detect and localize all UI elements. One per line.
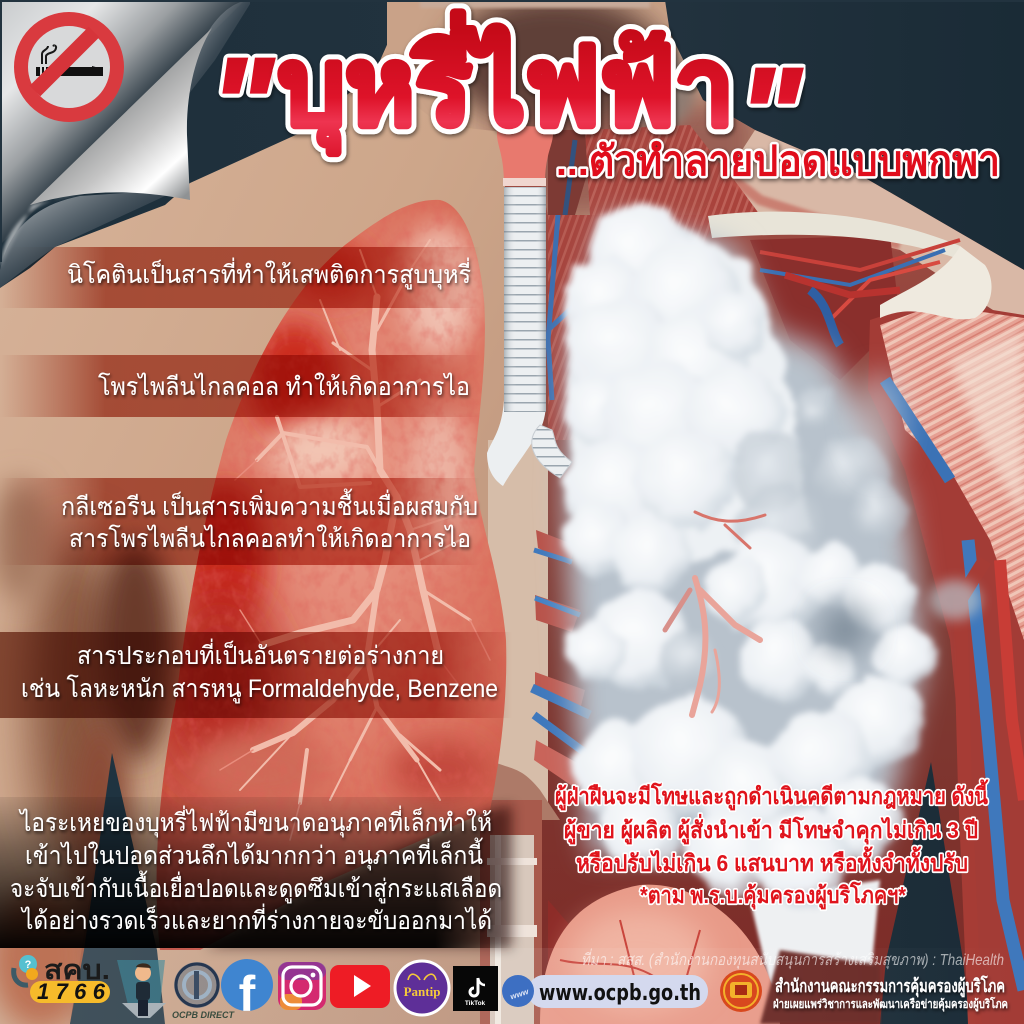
trachea windpipe xyxy=(487,95,572,486)
legal penalty notice: ผู้ขาย ผู้ผลิต ผู้สั่งนำเข้า มีโทษจำคุกไม่เกิน 3 ปี xyxy=(564,813,978,845)
text band 3 xyxy=(0,478,480,565)
shoulder blood vessels xyxy=(760,240,960,345)
logo: office seal xyxy=(720,970,762,1012)
text band 2 xyxy=(0,355,480,417)
website link pill: www.ocpb.go.th xyxy=(539,981,701,1006)
text block: nicotine: นิโคตินเป็นสารที่ทำให้เสพติดการสูบบุหรี่ xyxy=(67,257,471,290)
icon: Facebook: f xyxy=(239,966,256,1022)
subtitle: ...ตัวทำลายปอดแบบพกพา xyxy=(556,138,1000,184)
icon: TikTok xyxy=(453,966,498,1011)
page curl corner xyxy=(0,0,1024,288)
bronchial tree xyxy=(220,240,490,840)
website link pill xyxy=(502,975,708,1008)
text block: glycerin xyxy=(61,488,478,553)
arm xyxy=(868,300,1024,1024)
icon: Facebook xyxy=(221,959,273,1022)
website link pill: www xyxy=(509,987,530,1001)
neck with chin shadow xyxy=(370,0,770,220)
text band 1 xyxy=(0,247,480,308)
text block: propylene glycol: โพรไพลีนไกลคอล ทำให้เกิดอาการไอ xyxy=(98,372,470,401)
title: " xyxy=(210,31,274,178)
bottom organ xyxy=(540,885,880,1024)
icon: TikTok: TikTok xyxy=(465,1000,486,1007)
text band 5 xyxy=(0,797,512,948)
ribs xyxy=(532,530,595,790)
title: บุหรี่ไฟฟ้า xyxy=(278,11,734,155)
icon: YouTube xyxy=(330,965,390,1008)
title xyxy=(210,11,802,188)
shadow below the lung xyxy=(205,805,512,948)
logo: OCPB direct xyxy=(172,962,236,1020)
icon: Instagram xyxy=(278,962,326,1010)
logo: 1766 hotline: ? xyxy=(25,959,32,971)
left lung (healthy red lung) xyxy=(156,200,506,950)
smoke-filled right lung xyxy=(562,203,981,985)
text block: aerosol particles: เข้าไปในปอดส่วนลึกได้มากกว่า อนุภาคที่เล็กนี้ xyxy=(25,837,483,871)
logo: 1766 hotline: 1766 xyxy=(37,979,106,1004)
text block: aerosol particles: จะจับเข้ากับเนื้อเยื่อปอดและดูดซึมเข้าสู่กระแสเลือด xyxy=(10,870,502,904)
right anatomy: muscles of the neck, chest and arm xyxy=(505,100,1024,1024)
logo: 1766 hotline xyxy=(14,955,110,1004)
spine column xyxy=(480,440,560,1024)
legal penalty notice: *ตาม พ.ร.บ.คุ้มครองผู้บริโภคฯ* xyxy=(640,881,906,910)
title: " xyxy=(210,31,274,178)
title: บุหรี่ไฟฟ้า xyxy=(278,11,734,155)
text block: harmful substances: สารประกอบที่เป็นอันตรายต่อร่างกาย xyxy=(77,638,444,670)
footer strip xyxy=(0,948,1024,1024)
text block: aerosol particles: ได้อย่างรวดเร็วและยากที่ร่างกายจะขับออกมาได้ xyxy=(20,903,492,935)
torso skin with raised arm xyxy=(0,0,505,1024)
title: " xyxy=(738,41,802,188)
text band 4 xyxy=(0,632,512,718)
logo: OCPB direct: OCPB DIRECT xyxy=(172,1010,236,1020)
text block: harmful substances xyxy=(21,638,498,704)
red vessels in the smoke xyxy=(665,512,765,715)
legal penalty notice xyxy=(555,779,989,910)
logo: Pantip xyxy=(395,961,449,1015)
logo: 1766 hotline: สคบ. xyxy=(44,955,110,985)
logo: Pantip: Pantip xyxy=(404,984,440,999)
icon: mascot with hologram xyxy=(117,960,166,1018)
text block: glycerin: สารโพรไพลีนไกลคอลทำให้เกิดอาการไอ xyxy=(69,524,471,553)
collarbone and shoulder bone xyxy=(708,212,992,319)
text block: harmful substances: เช่น โลหะหนัก สารหนู Formaldehyde, Benzene xyxy=(21,674,498,704)
icon: no smoking e-cigarette sign xyxy=(21,19,117,115)
dark gap under the arm xyxy=(70,753,165,1024)
text block: aerosol particles: ไอระเหยของบุหรี่ไฟฟ้ามีขนาดอนุภาคที่เล็กทำให้ xyxy=(18,805,492,838)
title: " xyxy=(738,41,802,188)
text block: glycerin: กลีเซอรีน เป็นสารเพิ่มความชื้นเมื่อผสมกับ xyxy=(61,488,478,521)
text block: aerosol particles xyxy=(10,805,502,935)
legal penalty notice: หรือปรับไม่เกิน 6 แสนบาท หรือทั้งจำทั้งปรับ xyxy=(576,846,968,876)
organisation name xyxy=(773,975,1008,1012)
